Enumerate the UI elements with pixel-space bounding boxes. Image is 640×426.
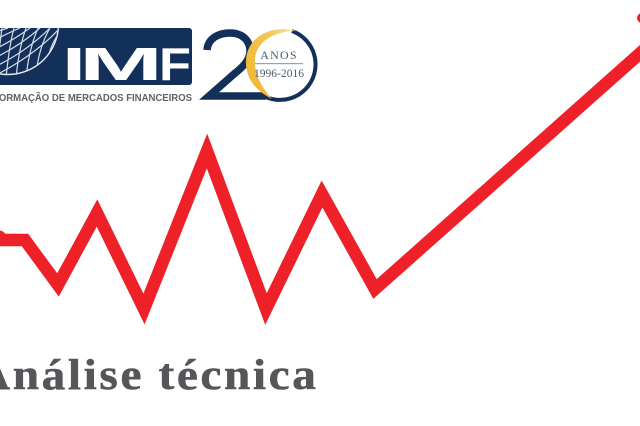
start point marker [0, 230, 6, 246]
numeral 0 ring [262, 31, 316, 100]
line chart [0, 13, 640, 309]
gold arc [246, 29, 296, 99]
20 anos anniversary badge [207, 29, 316, 100]
IMF wordmark: M [79, 38, 163, 90]
end point marker [637, 13, 640, 23]
icon: globe [0, 28, 59, 76]
IMF logo [0, 28, 192, 103]
red zigzag line [0, 48, 640, 309]
logo navy band [0, 28, 192, 85]
numeral 2 [207, 33, 266, 96]
IMF wordmark: F [159, 38, 191, 90]
years label: 1996-2016 [254, 66, 304, 80]
badge divider [255, 63, 303, 64]
IMF wordmark [62, 38, 191, 90]
IMF wordmark: I [62, 38, 86, 90]
anos label: ANOS [260, 48, 298, 62]
